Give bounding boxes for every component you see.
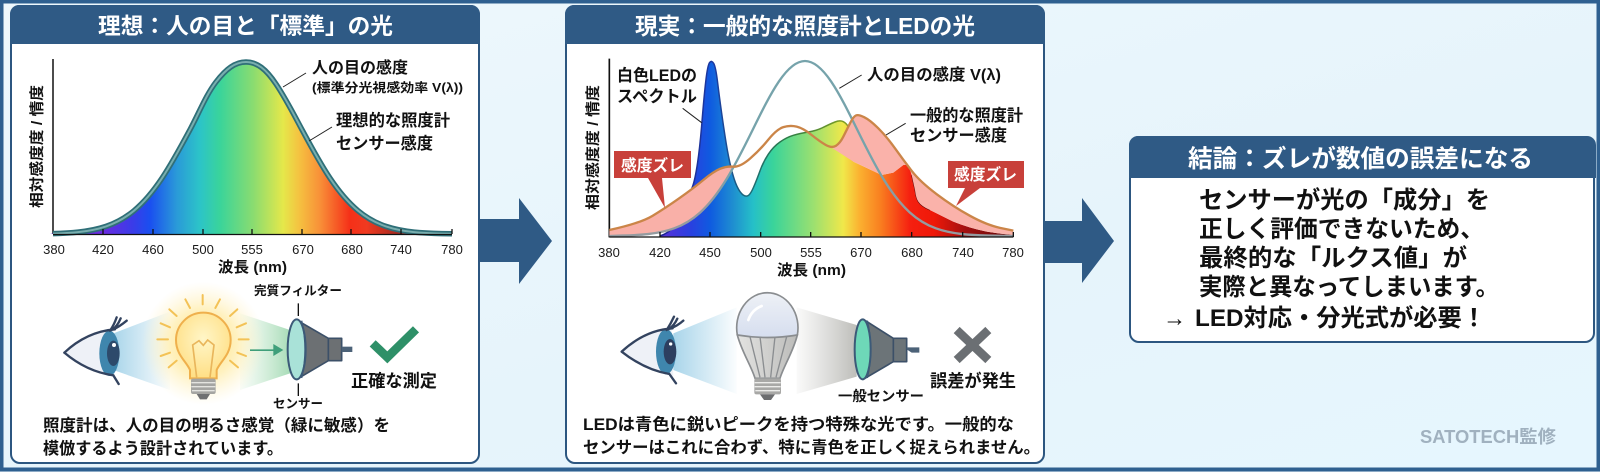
label: eye sensitivity: 人の目の感度 V(λ) [867, 65, 1001, 84]
label: white LED spectrum: 白色LEDの [617, 65, 697, 85]
text block: ideal description: 模倣するよう設計されています。 [43, 439, 283, 458]
icon: light bulb [157, 295, 249, 399]
panel: reality [565, 5, 1045, 463]
watermark: SATOTECH監修 [1420, 427, 1556, 447]
text block: conclusion [1163, 186, 1499, 332]
x axis tick labels: 450 [699, 245, 721, 260]
x axis title: 波長 (nm) [777, 261, 846, 279]
text block: ideal description [43, 415, 390, 458]
callout: ideal sensor [309, 111, 450, 153]
x axis tick labels: 555 [241, 242, 263, 257]
text block: conclusion: → [1163, 305, 1186, 332]
x axis tick labels: 670 [292, 242, 314, 257]
heading: reality: 現実：一般的な照度計とLEDの光 [635, 13, 975, 39]
text block: conclusion: 実際と異なってしまいます。 [1199, 274, 1499, 301]
text block: conclusion: 最終的な「ルクス値」が [1199, 244, 1467, 272]
icon: check mark [373, 329, 416, 357]
arrow: reality to conclusion [1044, 198, 1114, 283]
text block: reality description: LEDは青色に鋭いピークを持つ特殊な光です。一般的な [583, 414, 1014, 434]
callout: sensitivity mismatch right: 感度ズレ [954, 165, 1017, 184]
x axis tick labels: 500 [192, 242, 214, 257]
callout: eye sensitivity [283, 58, 463, 95]
x axis tick labels: 420 [649, 245, 671, 260]
panel: conclusion [1129, 136, 1596, 342]
label: general sensor: 一般的な照度計 [910, 106, 1023, 125]
x axis tick labels [43, 242, 463, 257]
arrow: ideal to reality [480, 198, 552, 284]
x axis tick labels: 380 [598, 245, 620, 260]
callout: sensitivity mismatch left: 感度ズレ [621, 156, 684, 175]
x axis tick labels [598, 245, 1024, 260]
label: filter: 完質フィルター [254, 283, 342, 298]
x axis tick labels: 680 [901, 245, 923, 260]
text block: conclusion: センサーが光の「成分」を [1199, 186, 1490, 214]
x axis tick labels: 670 [850, 245, 872, 260]
x axis tick labels: 555 [800, 245, 822, 260]
heading: ideal: 理想：人の目と「標準」の光 [98, 14, 393, 39]
x axis tick labels: 740 [390, 242, 412, 257]
x axis title: 波長 (nm) [218, 258, 287, 276]
callout: ideal sensor: センサー感度 [336, 134, 433, 153]
text block: reality description: センサーはこれに合わず、特に青色を正しく捉えられません。 [583, 437, 1040, 457]
y axis label: 相対感度度 / 情度 [28, 84, 46, 208]
callout: sensitivity mismatch right [948, 161, 1024, 206]
x axis tick labels: 680 [341, 242, 363, 257]
text block: ideal description: 照度計は、人の目の明るさ感覚（緑に敏感）を [43, 415, 390, 435]
label: error occurs: 誤差が発生 [930, 371, 1016, 391]
label: sensor: センサー [273, 397, 323, 411]
chart: LED spectrum [609, 59, 1013, 237]
callout: ideal sensor: 理想的な照度計 [336, 111, 450, 130]
illustration: eye, bulb, sensor [64, 282, 416, 405]
x axis tick labels: 460 [142, 242, 164, 257]
callout: sensitivity mismatch left [614, 151, 691, 208]
x axis tick labels: 380 [43, 242, 65, 257]
icon: sensor [288, 303, 352, 396]
x axis tick labels: 780 [1002, 245, 1024, 260]
x axis tick labels: 740 [952, 245, 974, 260]
text block: reality description [583, 414, 1040, 457]
label: white LED spectrum [617, 65, 697, 106]
callout: eye sensitivity: 人の目の感度 [312, 58, 408, 77]
icon: general sensor [855, 319, 919, 379]
panel: ideal [10, 5, 480, 463]
icon: eye [64, 317, 127, 384]
icon: cross mark [957, 330, 988, 360]
x axis tick labels: 780 [441, 242, 463, 257]
x axis tick labels: 500 [750, 245, 772, 260]
y axis label: 相対感度度 / 情度 [584, 84, 602, 210]
callout: eye sensitivity: (標準分光視感効率 V(λ)) [312, 80, 463, 95]
label: general sensor: 一般センサー [838, 388, 924, 404]
label: general sensor: センサー感度 [910, 126, 1007, 145]
icon: LED bulb [737, 293, 798, 400]
label: white LED spectrum: スペクトル [617, 87, 697, 106]
icon: eye [622, 317, 683, 383]
label: accurate measurement: 正確な測定 [351, 371, 437, 391]
label: general sensor [910, 106, 1023, 145]
heading: conclusion: 結論：ズレが数値の誤差になる [1188, 144, 1533, 173]
chart: ideal spectrum [50, 59, 452, 234]
illustration: eye, LED, sensor [622, 293, 988, 400]
text block: conclusion: LED対応・分光式が必要！ [1195, 304, 1486, 332]
arrow: light to sensor [250, 344, 283, 356]
x axis tick labels: 420 [92, 242, 114, 257]
text block: conclusion: 正しく評価できないため、 [1199, 216, 1484, 243]
